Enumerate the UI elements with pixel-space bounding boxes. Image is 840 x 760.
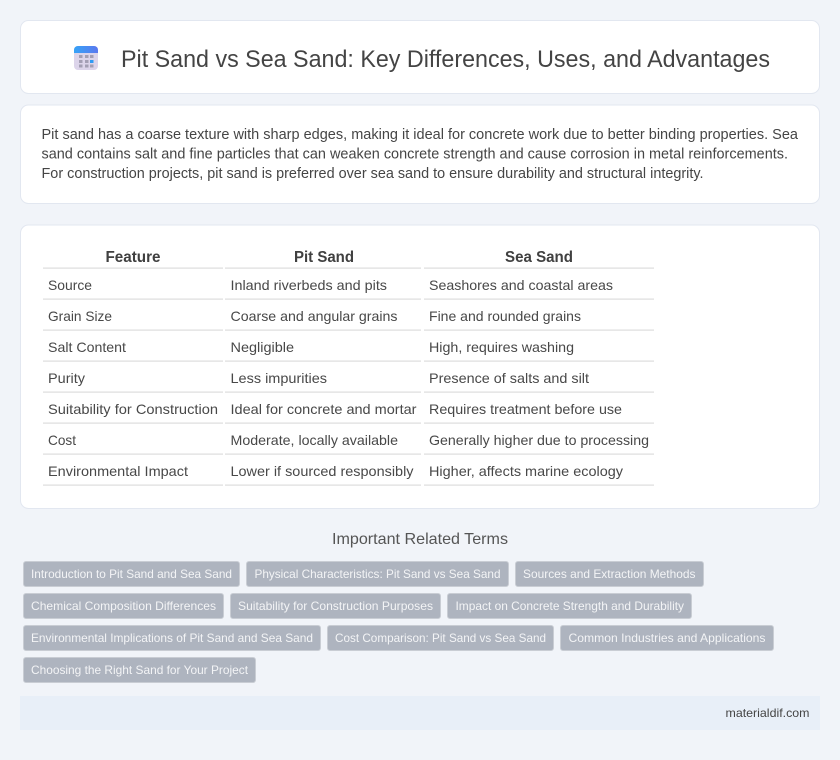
- row: suitability: Suitability for Construction: [48, 401, 218, 417]
- tag: choosing: [24, 658, 256, 682]
- row: source: [48, 277, 613, 293]
- tag: introduction: Introduction to Pit Sand and Sea Sand: [31, 567, 232, 581]
- tag: introduction: [24, 562, 240, 586]
- tag: common industries: Common Industries and Applications: [568, 631, 766, 645]
- row: environmental impact: [48, 463, 623, 479]
- footer text: materialdif.com: [726, 706, 810, 720]
- intro text: [42, 127, 799, 182]
- row: grain size: Grain Size: [48, 308, 112, 324]
- row: cost: Cost: [48, 432, 76, 448]
- row: grain size: Coarse and angular grains: [230, 308, 398, 324]
- title: Pit Sand vs Sea Sand: Key Differences, Uses, and Advantages: [121, 46, 770, 73]
- panel: introduction: [20, 105, 820, 204]
- tag: cost comparison: [328, 626, 554, 650]
- panel: header: [20, 20, 820, 94]
- row: source: Seashores and coastal areas: [429, 277, 613, 293]
- row: salt content: Negligible: [230, 339, 294, 355]
- tag: choosing: Choosing the Right Sand for Your Project: [31, 663, 249, 677]
- row: cost: Moderate, locally available: [230, 432, 398, 448]
- row: cost: Generally higher due to processing: [429, 432, 649, 448]
- intro text: sand contains salt and fine particles that can weaken concrete strength and cause corrosion in metal reinforcements.: [42, 146, 788, 162]
- tag: environmental implications: Environmental Implications of Pit Sand and Sea Sand: [31, 631, 313, 645]
- tag: cost comparison: Cost Comparison: Pit Sand vs Sea Sand: [335, 631, 546, 645]
- heading: related terms: Important Related Terms: [332, 531, 508, 548]
- tag: sources: Sources and Extraction Methods: [523, 567, 696, 581]
- row: environmental impact: Lower if sourced responsibly: [230, 463, 414, 479]
- row: environmental impact: Higher, affects marine ecology: [429, 463, 623, 479]
- row: grain size: Fine and rounded grains: [429, 308, 581, 324]
- tag: suitability: Suitability for Construction Purposes: [238, 599, 433, 613]
- tag: impact on concrete: [448, 594, 692, 618]
- tag: common industries: [560, 626, 774, 650]
- tag: suitability: [230, 594, 440, 618]
- row: suitability: Requires treatment before use: [429, 401, 622, 417]
- related term tags: [24, 562, 774, 682]
- row: source: Inland riverbeds and pits: [230, 277, 387, 293]
- tag: sources: [516, 562, 704, 586]
- table header: Pit Sand: [294, 249, 354, 266]
- intro text: For construction projects, pit sand is preferred over sea sand to ensure durability and structural integrity.: [42, 166, 704, 182]
- table header: Sea Sand: [505, 249, 573, 266]
- tag: environmental implications: [24, 626, 320, 650]
- row: salt content: Salt Content: [48, 339, 126, 355]
- intro text: Pit sand has a coarse texture with sharp edges, making it ideal for concrete work due to better binding properties. Sea: [42, 127, 799, 143]
- row: purity: Purity: [48, 370, 85, 386]
- row: cost: [48, 432, 649, 448]
- row: purity: Less impurities: [230, 370, 327, 386]
- tag: chemical composition: [24, 594, 224, 618]
- row: salt content: [48, 339, 574, 355]
- row: purity: [48, 370, 589, 386]
- row: salt content: High, requires washing: [429, 339, 574, 355]
- row: grain size: [48, 308, 581, 324]
- tag: chemical composition: Chemical Composition Differences: [31, 599, 216, 613]
- table header: Feature: [106, 249, 161, 266]
- tag: physical characteristics: Physical Characteristics: Pit Sand vs Sea Sand: [254, 567, 500, 581]
- panel: comparison table: [20, 225, 820, 508]
- tag: impact on concrete: Impact on Concrete Strength and Durability: [456, 599, 684, 613]
- row: suitability: [48, 401, 622, 417]
- row: source: Source: [48, 277, 92, 293]
- tag: physical characteristics: [246, 562, 508, 586]
- footer: [20, 696, 820, 730]
- row: suitability: Ideal for concrete and mortar: [230, 401, 417, 417]
- table header: [106, 249, 573, 266]
- row: environmental impact: Environmental Impact: [48, 463, 188, 479]
- icon: calendar: [74, 46, 98, 70]
- row: purity: Presence of salts and silt: [429, 370, 589, 386]
